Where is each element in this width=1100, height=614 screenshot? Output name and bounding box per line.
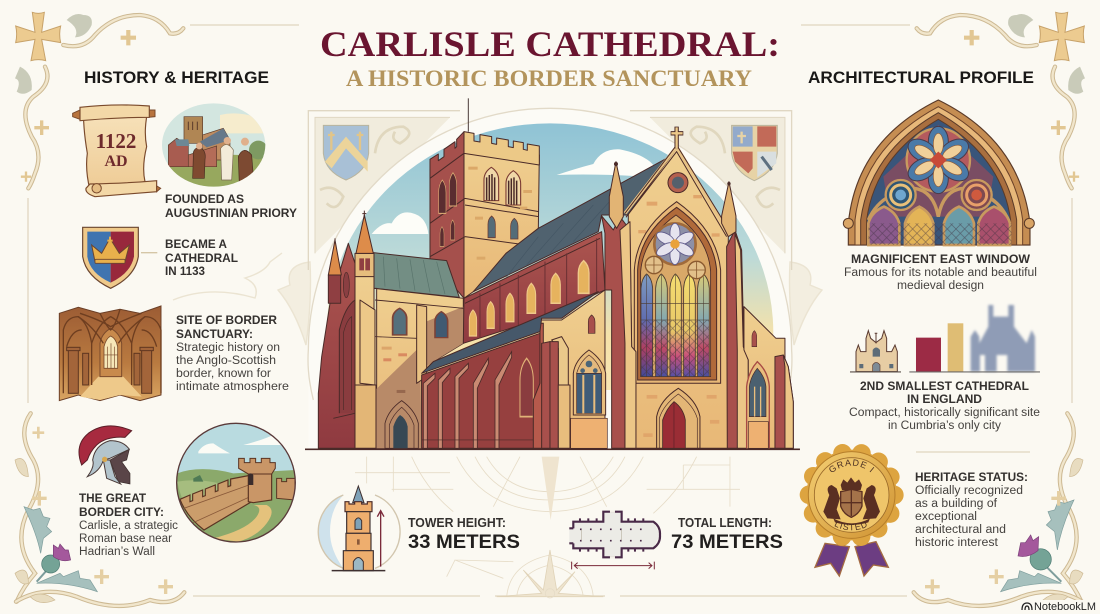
text: founded as Augustinian priory	[165, 194, 297, 220]
icon: roman helmet	[79, 426, 132, 484]
text: 2nd smallest cathedral: in Cumbria’s only city	[888, 420, 1001, 432]
icon: tower height	[318, 486, 400, 571]
text: tower height: 33 METERS	[408, 531, 520, 553]
corner ornament: top right	[917, 12, 1085, 188]
icon: small cathedral	[850, 331, 901, 372]
front buttresses and pinnacles	[602, 162, 748, 448]
title: A HISTORIC BORDER SANCTUARY	[346, 66, 752, 92]
medal text: GRADE I	[829, 459, 874, 472]
front gable	[625, 127, 730, 448]
text: total length: 73 METERS	[671, 531, 783, 553]
text: tower height: TOWER HEIGHT:	[408, 516, 506, 530]
bar: gold	[948, 323, 963, 372]
clouds	[372, 149, 658, 234]
pale flourishes beside cathedral	[173, 253, 822, 345]
text: heritage status: Officially recognized	[915, 485, 1023, 497]
icon: crown shield	[83, 227, 157, 288]
illustration: priory and monks	[162, 103, 266, 187]
1122 AD scroll text: AD	[104, 153, 128, 170]
icon: grade I listed medal	[800, 444, 904, 578]
illustration: east window	[843, 100, 1034, 245]
text: became a cathedral in 1133: BECAME A	[165, 239, 227, 251]
medal text: LISTED	[834, 521, 867, 530]
text: site of border sanctuary: SITE OF BORDER	[176, 315, 278, 327]
coat of arms	[823, 477, 880, 525]
ground line	[305, 447, 800, 452]
text: 2nd smallest cathedral: Compact, historically significant site	[849, 407, 1040, 419]
text: heritage status	[915, 472, 1028, 549]
south transept gable left	[318, 211, 376, 448]
north door	[385, 401, 418, 448]
corner ornament: top left	[15, 12, 183, 188]
front sandstone bay	[533, 290, 607, 448]
text: total length: TOTAL LENGTH:	[678, 516, 772, 530]
cathedral illustration	[305, 98, 800, 449]
south aisle wall	[422, 333, 540, 448]
text: heritage status: HERITAGE STATUS:	[915, 472, 1028, 484]
text: became a cathedral in 1133: CATHEDRAL	[165, 253, 238, 265]
text: founded as Augustinian priory: FOUNDED AS	[165, 194, 244, 206]
right wing	[744, 307, 793, 448]
NotebookLM watermark: NotebookLM	[1034, 601, 1096, 613]
north transept roof	[373, 253, 459, 297]
title: CARLISLE CATHEDRAL:	[320, 24, 780, 64]
text: site of border sanctuary: the Anglo-Scottish	[176, 355, 276, 367]
bar: burgundy	[916, 338, 941, 372]
text: site of border sanctuary	[176, 315, 289, 393]
text: the great border city: Carlisle, a strategic	[79, 520, 178, 532]
text: the great border city: Hadrian’s Wall	[79, 546, 155, 558]
text: 2nd smallest cathedral	[849, 381, 1040, 432]
icon: scroll	[73, 105, 161, 197]
text: magnificent east window: MAGNIFICENT EAST WINDOW	[851, 254, 1030, 266]
text: became a cathedral in 1133	[165, 239, 238, 278]
text: site of border sanctuary: border, known for	[176, 368, 271, 380]
heraldic corner panels	[308, 111, 792, 270]
great window	[634, 202, 721, 383]
NotebookLM watermark	[1018, 600, 1100, 614]
text: became a cathedral in 1133: IN 1133	[165, 266, 205, 278]
panel: 1122 founding	[73, 100, 268, 197]
text: magnificent east window	[844, 254, 1037, 292]
illustration: nave interior foldout	[59, 306, 161, 401]
heading: architectural profile: ARCHITECTURAL PROFILE	[808, 69, 1034, 87]
front door	[657, 388, 700, 448]
right heraldic shield	[732, 125, 777, 181]
text: site of border sanctuary: intimate atmosphere	[176, 381, 289, 393]
central sandstone wall	[365, 288, 463, 448]
corner ornament: bottom right with thistle	[914, 413, 1083, 606]
text: founded as Augustinian priory: AUGUSTINIAN PRIORY	[165, 208, 297, 220]
text: magnificent east window: Famous for its notable and beautiful	[844, 267, 1037, 279]
left heraldic shield	[323, 125, 369, 180]
south aisle slate roof	[422, 292, 598, 373]
illustration: Hadrian's Wall roundel	[175, 422, 297, 543]
central tower	[430, 98, 539, 298]
blueprint background: tower and compass	[355, 457, 740, 598]
text: tower height	[408, 516, 520, 553]
text: site of border sanctuary: SANCTUARY:	[176, 329, 253, 341]
text: heritage status: as a building of	[915, 498, 998, 510]
text: the great border city: Roman base near	[79, 533, 172, 545]
nave slate roof	[473, 158, 667, 292]
1122 AD scroll text	[96, 129, 136, 170]
text: site of border sanctuary: Strategic history on	[176, 342, 280, 354]
text: the great border city	[79, 493, 178, 558]
text: the great border city: BORDER CITY:	[79, 507, 164, 519]
sky	[327, 123, 773, 390]
nave clerestory	[463, 232, 605, 343]
text: 2nd smallest cathedral: 2ND SMALLEST CATHEDRAL	[860, 381, 1029, 393]
blurred silhouette: large cathedral	[971, 305, 1035, 372]
1122 AD scroll text: 1122	[96, 129, 136, 153]
ribbons	[815, 542, 888, 576]
corner ornament: bottom left with thistle	[15, 413, 184, 606]
arch band	[308, 108, 792, 448]
text: heritage status: exceptional	[915, 511, 977, 523]
text: heritage status: historic interest	[915, 537, 999, 549]
text: 2nd smallest cathedral: IN ENGLAND	[907, 394, 982, 406]
title	[320, 24, 780, 92]
icon: floor plan with length arrow	[569, 512, 660, 569]
text: magnificent east window: medieval design	[897, 280, 984, 292]
chart: size comparison	[850, 305, 1040, 372]
heading: history and heritage: HISTORY & HERITAGE	[84, 69, 269, 87]
text: heritage status: architectural and	[915, 524, 1006, 536]
text: total length	[671, 516, 783, 553]
medal text	[829, 459, 874, 530]
text: the great border city: THE GREAT	[79, 493, 146, 505]
